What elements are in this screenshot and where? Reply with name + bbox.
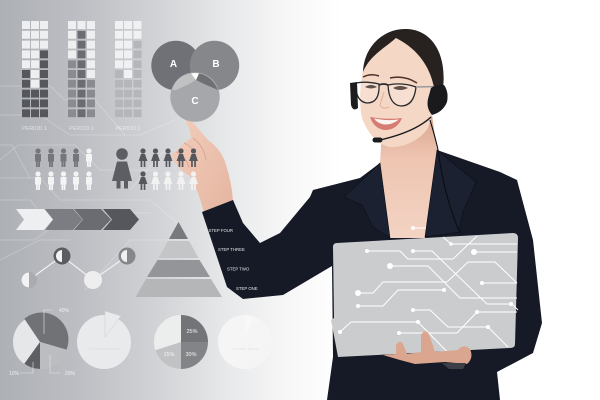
chevron process arrow [16, 209, 139, 230]
pie 3 labels: 25% [186, 329, 198, 335]
step pyramid [136, 222, 222, 297]
pictogram: right group [139, 148, 198, 190]
headset: cord [430, 120, 460, 233]
woman: nose [380, 92, 389, 108]
pie 1 labels: 40% [59, 308, 70, 314]
woman: eyes [365, 85, 408, 90]
pie 3 labels: 15% [163, 352, 175, 358]
step labels: STEP ONE [236, 286, 258, 291]
pie 1 labels: 10% [9, 371, 20, 377]
woman: face [360, 38, 433, 147]
pictogram: large woman [112, 148, 132, 188]
bar grid: period 2 [69, 21, 94, 132]
venn labels: A [170, 59, 177, 70]
venn labels [170, 59, 220, 107]
laptop circuit lines [340, 236, 518, 368]
pie chart 4 [218, 315, 272, 369]
label: period 3: PERIOD 1 [116, 126, 140, 132]
woman: pointing hand [172, 114, 233, 212]
bar grid: period 1 [22, 21, 47, 132]
finger creases [176, 138, 206, 168]
pie 1 labels: 20% [65, 371, 76, 377]
pie 1 labels [9, 308, 76, 377]
step labels [208, 228, 258, 291]
laptop [331, 233, 518, 368]
step labels: STEP TWO [227, 266, 250, 272]
bar grid: period 3 [116, 21, 140, 132]
woman: jacket lapels [344, 150, 476, 238]
step labels: STEP FOUR [208, 228, 233, 233]
woman: neck and chest [380, 115, 437, 238]
woman: left earcup [350, 82, 358, 109]
woman: hand holding laptop [383, 331, 471, 364]
pie chart 3 [154, 315, 208, 369]
step labels: STEP THREE [218, 247, 245, 252]
headset: microphone boom [375, 117, 431, 140]
pie 3 labels: 30% [185, 352, 197, 358]
background circuit lines [0, 86, 205, 290]
venn labels: B [212, 59, 220, 70]
pie 2 caption: 25% each period [89, 346, 119, 351]
pictogram: left group [35, 148, 92, 190]
venn labels: C [191, 96, 199, 107]
woman: glasses [356, 82, 437, 106]
pie 3 labels [163, 329, 198, 358]
venn diagram [151, 41, 239, 122]
pie 4 caption: 3% each period [231, 346, 259, 351]
woman: smile [370, 117, 402, 130]
woman: eyebrows [363, 75, 417, 83]
pie chart 2 [77, 311, 131, 369]
woman: hair [363, 29, 444, 88]
laptop circuit nodes [338, 242, 513, 335]
woman: jacket [202, 150, 542, 400]
pie chart 1 [9, 308, 76, 377]
label: period 2: PERIOD 1 [69, 126, 94, 132]
neck circuit line [411, 226, 426, 230]
woman: wristwatch [442, 363, 466, 369]
label: period 1: PERIOD 1 [22, 126, 47, 132]
node timeline [21, 248, 136, 289]
headset: earcup [428, 85, 448, 115]
